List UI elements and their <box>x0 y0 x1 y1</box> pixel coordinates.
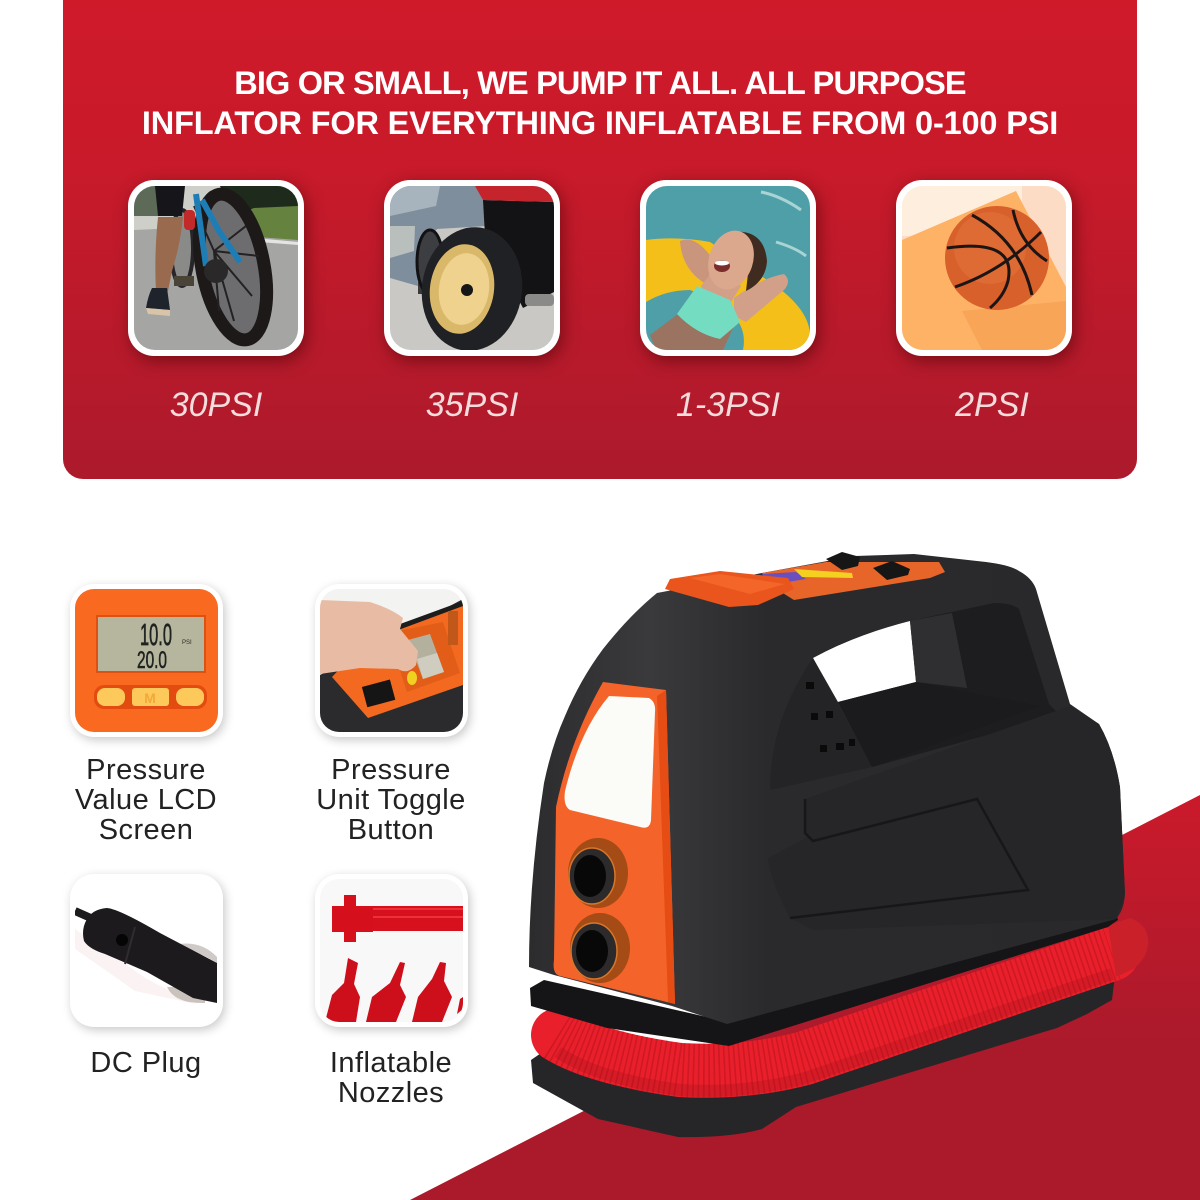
feature card: LCD screen <box>70 584 223 737</box>
pump body <box>529 554 1125 1024</box>
label: pressure value LCD screen <box>75 754 217 846</box>
feature card: unit toggle button <box>315 584 468 737</box>
label: pressure unit toggle button: Button <box>348 814 434 846</box>
label: 30PSI: 30PSI <box>170 386 262 424</box>
hose elbow <box>1108 918 1148 977</box>
white lamp lens <box>565 696 655 828</box>
label: inflatable nozzles: Nozzles <box>338 1077 444 1109</box>
shoulder raised panel <box>768 706 1125 930</box>
label: pressure unit toggle button: Unit Toggle <box>316 784 466 816</box>
feature card: LCD screen: M <box>144 690 156 706</box>
photo: bicycle <box>128 180 304 356</box>
label: pressure unit toggle button <box>316 754 466 846</box>
orange front panel <box>554 682 675 1004</box>
lower lip of body <box>530 912 1118 1046</box>
handle opening <box>813 603 1060 767</box>
air port 2 <box>570 913 630 983</box>
label: 35PSI: 35PSI <box>426 386 518 424</box>
label: pressure value LCD screen: Value LCD <box>75 784 217 816</box>
label: inflatable nozzles: Inflatable <box>330 1047 452 1079</box>
title: BIG OR SMALL, WE PUMP IT ALL. ALL PURPOSE <box>234 65 966 101</box>
feature card: LCD screen: 20.0 <box>137 647 167 674</box>
side vent wedge <box>770 658 872 790</box>
feature card: inflatable nozzles <box>315 874 468 1027</box>
product: air pump inflator <box>529 552 1148 1138</box>
feature card: LCD screen: PSI <box>182 640 192 646</box>
air port 1 <box>568 838 628 908</box>
label: pressure value LCD screen: Screen <box>99 814 193 846</box>
label: inflatable nozzles <box>330 1047 452 1109</box>
photo: spare tire <box>384 180 560 356</box>
top control strip <box>665 552 945 607</box>
panel: top red banner <box>63 0 1137 479</box>
bottom plate <box>531 975 1115 1137</box>
photo: basketball <box>896 180 1072 356</box>
hose <box>558 954 1112 1091</box>
label: pressure value LCD screen: Pressure <box>86 754 206 786</box>
recessed panel outline <box>790 799 1028 918</box>
feature card: DC plug <box>70 874 223 1027</box>
photo: girl in pool ring <box>640 180 816 356</box>
feature card: LCD screen: 10.0 <box>140 617 172 652</box>
label: pressure unit toggle button: Pressure <box>331 754 451 786</box>
label: 2PSI: 2PSI <box>955 386 1029 424</box>
title <box>142 65 1058 141</box>
title: INFLATOR FOR EVERYTHING INFLATABLE FROM 0-100 PSI <box>142 105 1058 141</box>
label: DC plug: DC Plug <box>90 1047 202 1079</box>
label: 1-3PSI: 1-3PSI <box>676 386 780 424</box>
